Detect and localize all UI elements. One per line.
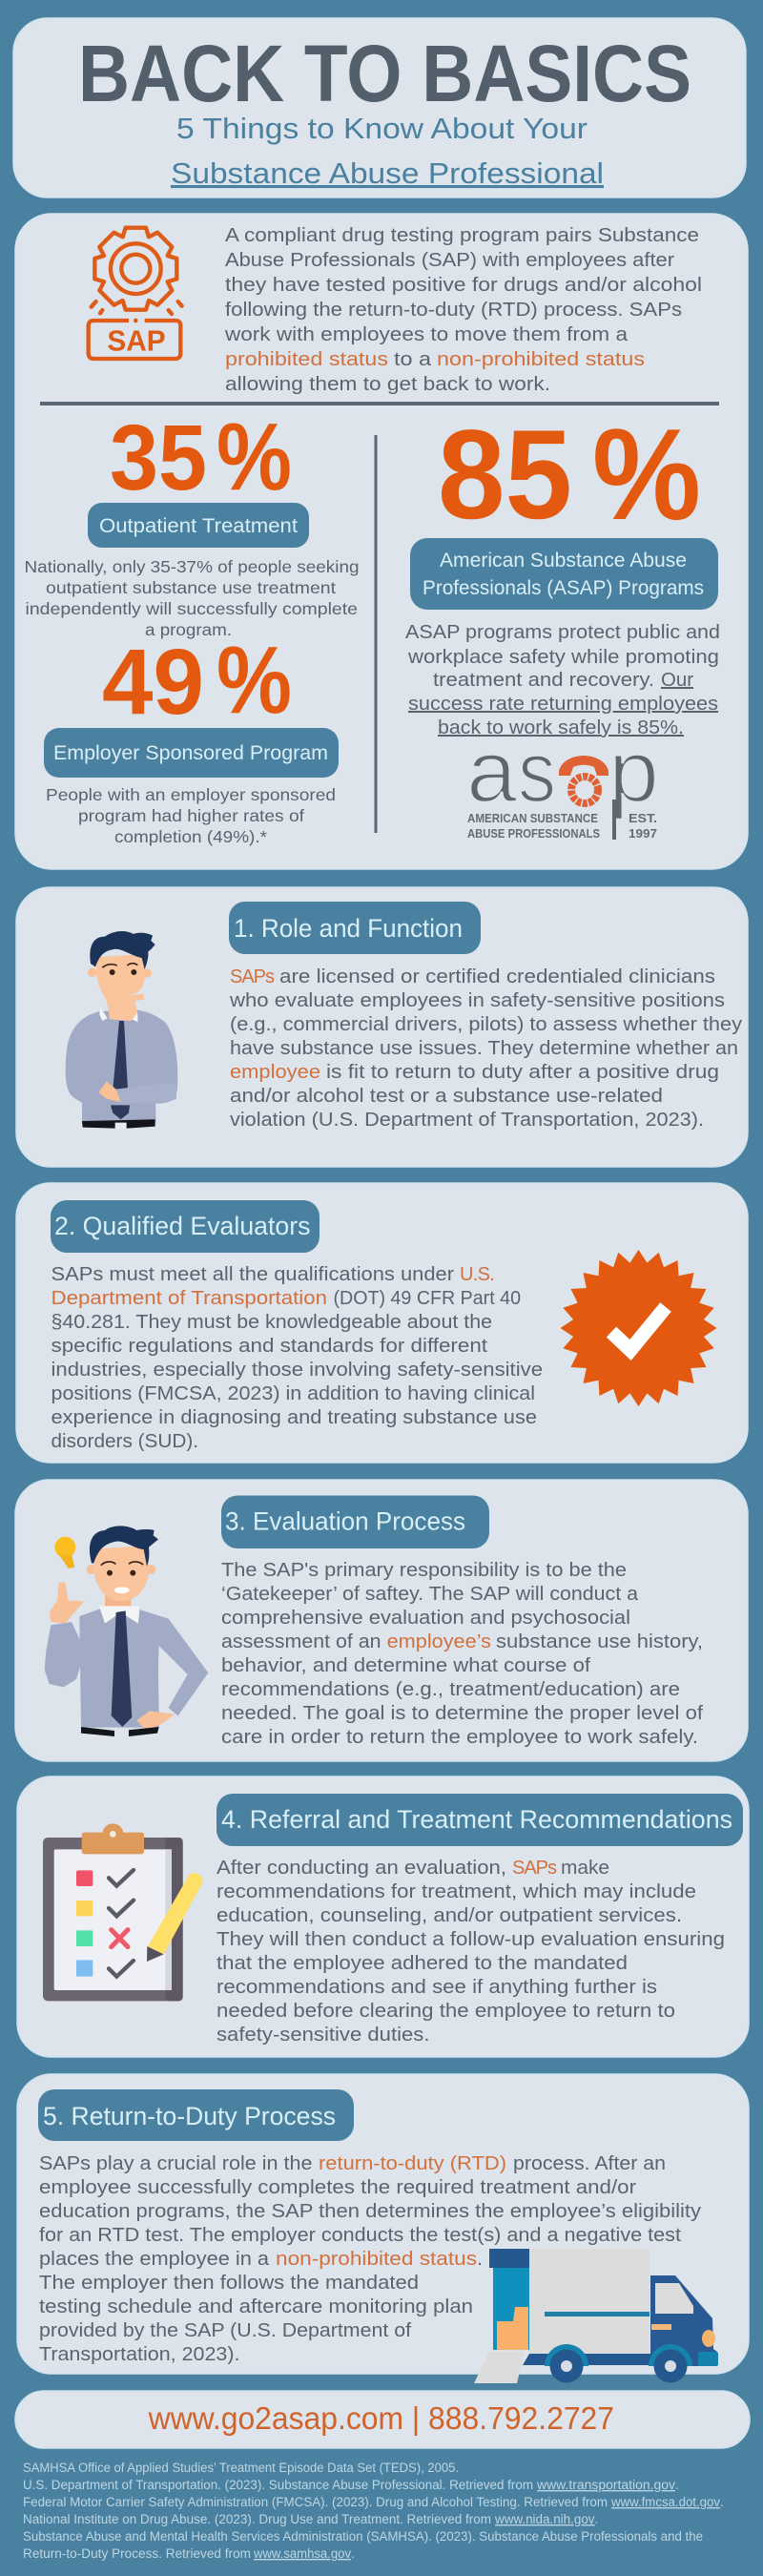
intro text bbox=[224, 225, 702, 395]
text: outpatient statistic: Nationally, only 35-37% of people seeking bbox=[25, 557, 359, 576]
intro text: following the return-to-duty (RTD) process. SAPs bbox=[225, 300, 682, 321]
subtitle line 2: Substance Abuse Professional bbox=[171, 156, 604, 190]
label: employer sponsored program bbox=[44, 728, 339, 778]
icon: delivery truck bbox=[474, 2249, 718, 2383]
text: ASAP programs: success rate returning employees bbox=[408, 694, 718, 715]
panel: 5. return-to-duty process bbox=[17, 2074, 749, 2383]
intro text: work with employees to move them from a bbox=[224, 324, 629, 345]
statistic: 35 percent bbox=[110, 404, 292, 510]
heading bbox=[229, 902, 481, 954]
body text: needed. The goal is to determine the proper level of bbox=[221, 1703, 703, 1724]
body text: return-to-duty (RTD) bbox=[319, 2153, 506, 2174]
body text: care in order to return the employee to work safely. bbox=[221, 1727, 698, 1748]
footer: references: Federal Motor Carrier Safety Administration (FMCSA). (2023). Drug and Alcohol Testing. Retrieved from bbox=[23, 2495, 608, 2509]
body text: recommendations for treatment, which may include bbox=[217, 1881, 696, 1902]
body text: Department of Transportation bbox=[52, 1288, 327, 1309]
footer: references: National Institute on Drug Abuse. (2023). Drug Use and Treatment. Retrieved from bbox=[23, 2512, 491, 2526]
text: ASAP programs: Our bbox=[661, 670, 693, 691]
body text: Transportation, 2023). bbox=[39, 2344, 240, 2365]
body text: provided by the SAP (U.S. Department of bbox=[39, 2320, 411, 2341]
icon: SAP gear: SAP bbox=[107, 324, 166, 357]
heading bbox=[38, 2089, 354, 2141]
body text: who evaluate employees in safety-sensitive positions bbox=[229, 990, 725, 1011]
panel: header bbox=[13, 18, 746, 197]
heading bbox=[51, 1200, 320, 1253]
heading: 1. Role and Function bbox=[234, 914, 463, 943]
body text: employee bbox=[230, 1062, 320, 1083]
statistic: 49 percent bbox=[102, 627, 292, 734]
body text: U.S. bbox=[460, 1264, 494, 1285]
statistic: 85 percent bbox=[438, 402, 701, 547]
body text: is fit to return to duty after a positive drug bbox=[326, 1062, 719, 1083]
body text: The SAP's primary responsibility is to be the bbox=[221, 1560, 627, 1581]
body text bbox=[52, 1264, 543, 1452]
logo: ASAP: AMERICAN SUBSTANCE bbox=[467, 811, 598, 825]
body text bbox=[221, 1560, 703, 1748]
body text: safety-sensitive duties. bbox=[217, 2025, 429, 2046]
body text: are licensed or certified credentialed clinicians bbox=[279, 966, 715, 987]
text: outpatient statistic: independently will successfully complete bbox=[25, 599, 358, 618]
label: ASAP programs: American Substance Abuse bbox=[440, 549, 687, 571]
panel: 1. role and function bbox=[16, 887, 748, 1167]
heading: 4. Referral and Treatment Recommendations bbox=[221, 1805, 732, 1834]
footer: references: www.fmcsa.dot.gov bbox=[610, 2495, 720, 2509]
body text: testing schedule and aftercare monitoring plan bbox=[39, 2296, 473, 2317]
body text: have substance use issues. They determine whether an bbox=[230, 1038, 738, 1059]
logo: ASAP: a bbox=[466, 723, 518, 821]
body text: recommendations (e.g., treatment/education) are bbox=[221, 1679, 680, 1700]
footer: references: Substance Abuse and Mental Health Services Administration (SAMHSA). (2023). Substance Abuse Professionals and the bbox=[23, 2529, 703, 2544]
text: employer statistic bbox=[46, 785, 336, 846]
intro text: prohibited status bbox=[225, 349, 388, 370]
body text: disorders (SUD). bbox=[52, 1431, 198, 1452]
body text: education, counseling, and/or outpatient services. bbox=[217, 1905, 682, 1926]
statistic: 49 percent: 49 bbox=[102, 630, 204, 734]
label: employer sponsored program: Employer Sponsored Program bbox=[53, 741, 328, 764]
body text: experience in diagnosing and treating substance use bbox=[52, 1407, 537, 1428]
text: employer statistic: completion (49%).* bbox=[114, 827, 267, 846]
body text: that the employee adhered to the mandated bbox=[217, 1953, 628, 1974]
footer: references: www.transportation.gov bbox=[536, 2478, 675, 2492]
statistic: 49 percent: % bbox=[217, 627, 292, 734]
statistic: 35 percent: % bbox=[217, 404, 292, 510]
body text: . bbox=[477, 2249, 483, 2270]
body text: (DOT) 49 CFR Part 40 bbox=[334, 1288, 521, 1309]
footer: references: . bbox=[675, 2478, 679, 2492]
intro text: non-prohibited status bbox=[437, 349, 645, 370]
panel: intro and statistics bbox=[15, 214, 748, 869]
text: outpatient statistic: outpatient substance use treatment bbox=[46, 578, 336, 597]
icon: clipboard checklist bbox=[43, 1823, 203, 2001]
footer: references bbox=[23, 2461, 724, 2561]
body text: SAPs bbox=[512, 1858, 557, 1879]
body text: specific regulations and standards for different bbox=[52, 1336, 487, 1357]
body text: non-prohibited status bbox=[276, 2249, 477, 2270]
label: outpatient treatment bbox=[88, 503, 309, 548]
body text: and/or alcohol test or a substance use-related bbox=[230, 1086, 663, 1107]
text: ASAP programs: back to work safely is 85%. bbox=[438, 717, 684, 738]
text: outpatient statistic: a program. bbox=[145, 620, 232, 639]
icon: check badge bbox=[561, 1250, 717, 1406]
heading: 2. Qualified Evaluators bbox=[54, 1212, 311, 1240]
statistic: 35 percent: 35 bbox=[110, 405, 207, 509]
footer: references: www.samhsa.gov bbox=[253, 2546, 351, 2561]
heading: 5. Return-to-Duty Process bbox=[43, 2102, 336, 2130]
panel: contact details: www.go2asap.com | 888.792.2727 bbox=[148, 2400, 614, 2436]
body text: comprehensive evaluation and psychosocial bbox=[221, 1608, 630, 1629]
intro text: they have tested positive for drugs and/or alcohol bbox=[225, 275, 702, 296]
subtitle line 1: 5 Things to Know About Your bbox=[176, 112, 588, 145]
footer: references: U.S. Department of Transportation. (2023). Substance Abuse Professional. Retrieved from bbox=[23, 2478, 533, 2492]
body text: industries, especially those involving safety-sensitive bbox=[52, 1360, 543, 1381]
body text: SAPs bbox=[230, 966, 275, 987]
icon: thinking man bbox=[66, 931, 177, 1129]
heading bbox=[217, 1794, 743, 1846]
statistic: 85 percent: % bbox=[592, 402, 701, 547]
text: employer statistic: program had higher rates of bbox=[78, 806, 304, 825]
body text: make bbox=[561, 1858, 609, 1879]
label: outpatient treatment: Outpatient Treatment bbox=[99, 514, 298, 537]
body text: employee successfully completes the required treatment and/or bbox=[39, 2177, 636, 2198]
body text: assessment of an bbox=[221, 1631, 382, 1652]
panel: 2. qualified evaluators bbox=[16, 1183, 748, 1463]
body text: ‘Gatekeeper’ of saftey. The SAP will conduct a bbox=[221, 1584, 639, 1605]
footer: references: Return-to-Duty Process. Retrieved from bbox=[23, 2546, 251, 2561]
heading: 3. Evaluation Process bbox=[225, 1507, 465, 1536]
panel: 4. referral and treatment recommendations bbox=[17, 1776, 749, 2057]
text: employer statistic: People with an employer sponsored bbox=[46, 785, 336, 804]
text: outpatient statistic bbox=[25, 557, 359, 639]
body text: substance use history, bbox=[496, 1631, 703, 1652]
body text: SAPs must meet all the qualifications under bbox=[52, 1264, 454, 1285]
text: ASAP programs bbox=[405, 622, 720, 738]
logo: ASAP: s bbox=[518, 725, 556, 821]
intro text: A compliant drug testing program pairs Substance bbox=[225, 225, 699, 246]
footer: references: . bbox=[720, 2495, 724, 2509]
body text bbox=[229, 966, 742, 1131]
body text: recommendations and see if anything further is bbox=[217, 1977, 657, 1998]
body text: §40.281. They must be knowledgeable about the bbox=[52, 1312, 492, 1333]
label: ASAP programs: Professionals (ASAP) Programs bbox=[423, 576, 704, 599]
title: BACK TO BASICS bbox=[78, 29, 691, 118]
logo: ASAP: 1997 bbox=[629, 826, 657, 841]
icon: man with idea bbox=[45, 1526, 208, 1736]
body text: (e.g., commercial drivers, pilots) to assess whether they bbox=[230, 1014, 742, 1035]
intro text: allowing them to get back to work. bbox=[225, 374, 550, 395]
body text: The employer then follows the mandated bbox=[39, 2273, 419, 2294]
body text bbox=[39, 2153, 701, 2365]
body text: for an RTD test. The employer conducts the test(s) and a negative test bbox=[39, 2225, 681, 2246]
body text: violation (U.S. Department of Transportation, 2023). bbox=[230, 1110, 704, 1131]
intro text: Abuse Professionals (SAP) with employees after bbox=[225, 250, 674, 271]
logo: ASAP: EST. bbox=[629, 811, 657, 825]
body text: needed before clearing the employee to return to bbox=[217, 2001, 675, 2022]
footer: references: . bbox=[351, 2546, 355, 2561]
body text: process. After an bbox=[513, 2153, 666, 2174]
statistic: 85 percent: 85 bbox=[438, 405, 572, 546]
text: ASAP programs: treatment and recovery. bbox=[433, 670, 654, 691]
icon: SAP gear bbox=[89, 228, 182, 359]
heading bbox=[221, 1496, 489, 1548]
panel: 3. evaluation process bbox=[15, 1480, 748, 1761]
logo: ASAP: ABUSE PROFESSIONALS bbox=[467, 826, 600, 841]
body text: education programs, the SAP then determines the employee’s eligibility bbox=[39, 2201, 701, 2222]
body text: SAPs play a crucial role in the bbox=[39, 2153, 312, 2174]
logo: ASAP: p bbox=[608, 723, 659, 821]
body text: employee’s bbox=[387, 1631, 491, 1652]
intro text: to a bbox=[394, 349, 432, 370]
body text: They will then conduct a follow-up evaluation ensuring bbox=[217, 1929, 725, 1950]
body text: positions (FMCSA, 2023) in addition to having clinical bbox=[52, 1383, 535, 1404]
text: ASAP programs: workplace safety while promoting bbox=[407, 647, 719, 668]
body text: After conducting an evaluation, bbox=[217, 1858, 506, 1879]
footer: references: www.nida.nih.gov bbox=[494, 2512, 595, 2526]
body text: places the employee in a bbox=[39, 2249, 270, 2270]
footer: references: . bbox=[595, 2512, 598, 2526]
body text: behavior, and determine what course of bbox=[221, 1655, 590, 1676]
footer: references: SAMHSA Office of Applied Studies’ Treatment Episode Data Set (TEDS), 2005. bbox=[23, 2461, 459, 2475]
panel: contact details bbox=[15, 2391, 750, 2448]
logo: ASAP bbox=[466, 723, 659, 841]
body text bbox=[217, 1858, 725, 2046]
text: ASAP programs: ASAP programs protect public and bbox=[405, 622, 720, 643]
label: ASAP programs bbox=[410, 538, 718, 610]
